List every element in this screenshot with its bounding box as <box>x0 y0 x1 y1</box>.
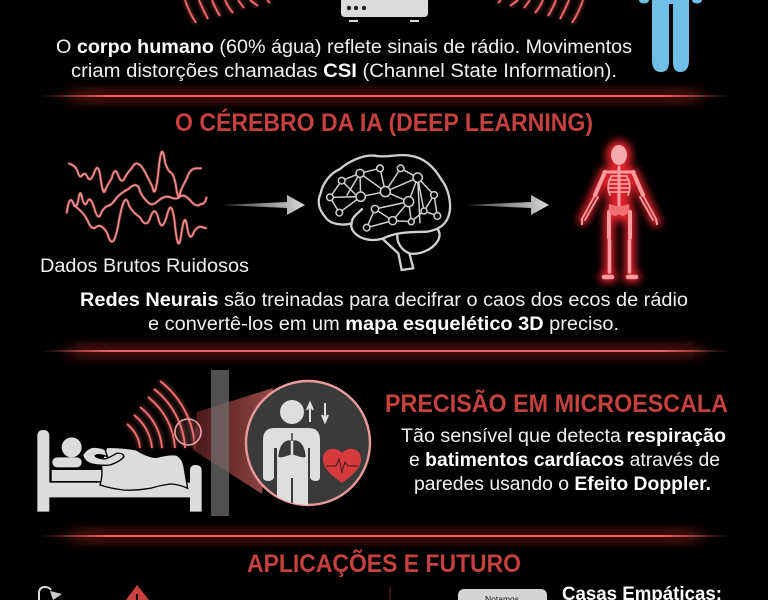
icon: radio waves through wall <box>127 381 195 449</box>
heading: deep learning: O CÉREBRO DA IA (DEEP LEARNING) <box>175 108 593 137</box>
text: redes neurais: Redes Neurais são treinadas para decifrar o caos dos ecos de rádio <box>80 290 688 311</box>
chart: noisy raw signal waves <box>67 152 207 244</box>
text: efeito doppler: Tão sensível que detecta respiração <box>401 426 726 447</box>
icon: radio waves right of router <box>498 0 583 23</box>
arrow: signal to brain <box>222 195 305 215</box>
icon: blue human figure <box>639 0 702 72</box>
icon: sleeping person in bed <box>37 430 202 512</box>
icon: glowing skeleton <box>582 145 657 277</box>
icon: router <box>341 0 428 22</box>
icon: magnified body with lungs and heart <box>246 381 370 510</box>
text: corpo humano <box>56 37 632 82</box>
divider: applications <box>390 586 391 600</box>
small focus circle <box>175 419 201 445</box>
heading: aplicações: APLICAÇÕES E FUTURO <box>247 548 521 578</box>
label: dados brutos: Dados Brutos Ruidosos <box>40 256 249 277</box>
arrow: brain to skeleton <box>466 195 549 215</box>
wall <box>211 370 229 516</box>
beam: magnification cone <box>193 388 273 494</box>
text: efeito doppler <box>401 426 726 495</box>
text: corpo humano: O corpo humano (60% água) reflete sinais de rádio. Movimentos <box>56 37 632 58</box>
icon: radio waves left of router <box>185 0 270 23</box>
text: corpo humano: criam distorções chamadas CSI (Channel State Information). <box>71 61 617 82</box>
heading: precisão: PRECISÃO EM MICROESCALA <box>385 388 728 418</box>
speech bubble <box>458 589 547 600</box>
icon: brain with neural network <box>319 155 450 270</box>
text: efeito doppler: e batimentos cardíacos através de <box>409 450 720 471</box>
icon: lamp <box>39 587 62 600</box>
text: redes neurais: e convertê-los em um mapa esquelético 3D preciso. <box>148 314 619 335</box>
icon: warning triangle <box>126 585 149 600</box>
text: efeito doppler: paredes usando o Efeito Doppler. <box>414 474 711 495</box>
text: redes neurais <box>80 290 688 335</box>
